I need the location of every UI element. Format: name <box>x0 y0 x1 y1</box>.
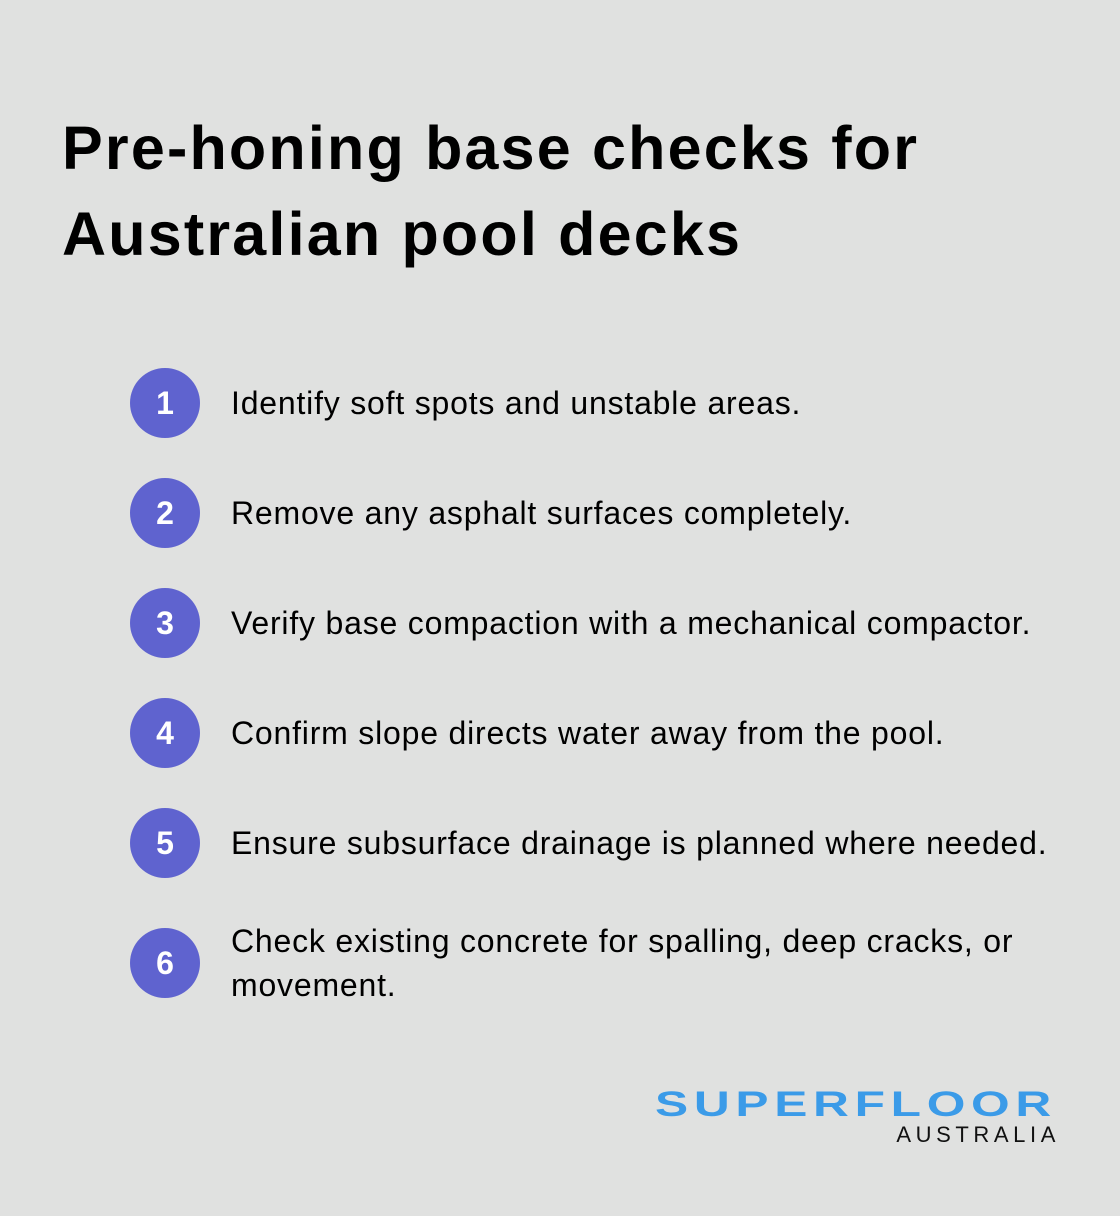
step 3: Verify base compaction with a mechanical compactor. <box>231 605 1031 641</box>
step 3 <box>130 588 1031 658</box>
step 5: Ensure subsurface drainage is planned where needed. <box>231 825 1047 861</box>
title <box>62 114 919 268</box>
title: Australian pool decks <box>62 200 742 268</box>
step 6: Check existing concrete for spalling, deep cracks, or movement. <box>231 923 1013 1003</box>
logo: AUSTRALIA <box>896 1122 1060 1147</box>
step 6: 6 <box>156 945 174 981</box>
step 4: 4 <box>156 715 174 751</box>
step 1: 1 <box>156 385 174 421</box>
step 2: 2 <box>156 495 174 531</box>
step 1: Identify soft spots and unstable areas. <box>231 385 801 421</box>
step 2 <box>130 478 852 548</box>
step 4: Confirm slope directs water away from the pool. <box>231 715 944 751</box>
logo: SUPERFLOOR <box>655 1085 1057 1124</box>
step 3: 3 <box>156 605 174 641</box>
step 5 <box>130 808 1047 878</box>
step 5: 5 <box>156 825 174 861</box>
step 4 <box>130 698 944 768</box>
logo <box>655 1085 1060 1147</box>
step 1 <box>130 368 801 438</box>
title: Pre-honing base checks for <box>62 114 919 182</box>
step 2: Remove any asphalt surfaces completely. <box>231 495 852 531</box>
